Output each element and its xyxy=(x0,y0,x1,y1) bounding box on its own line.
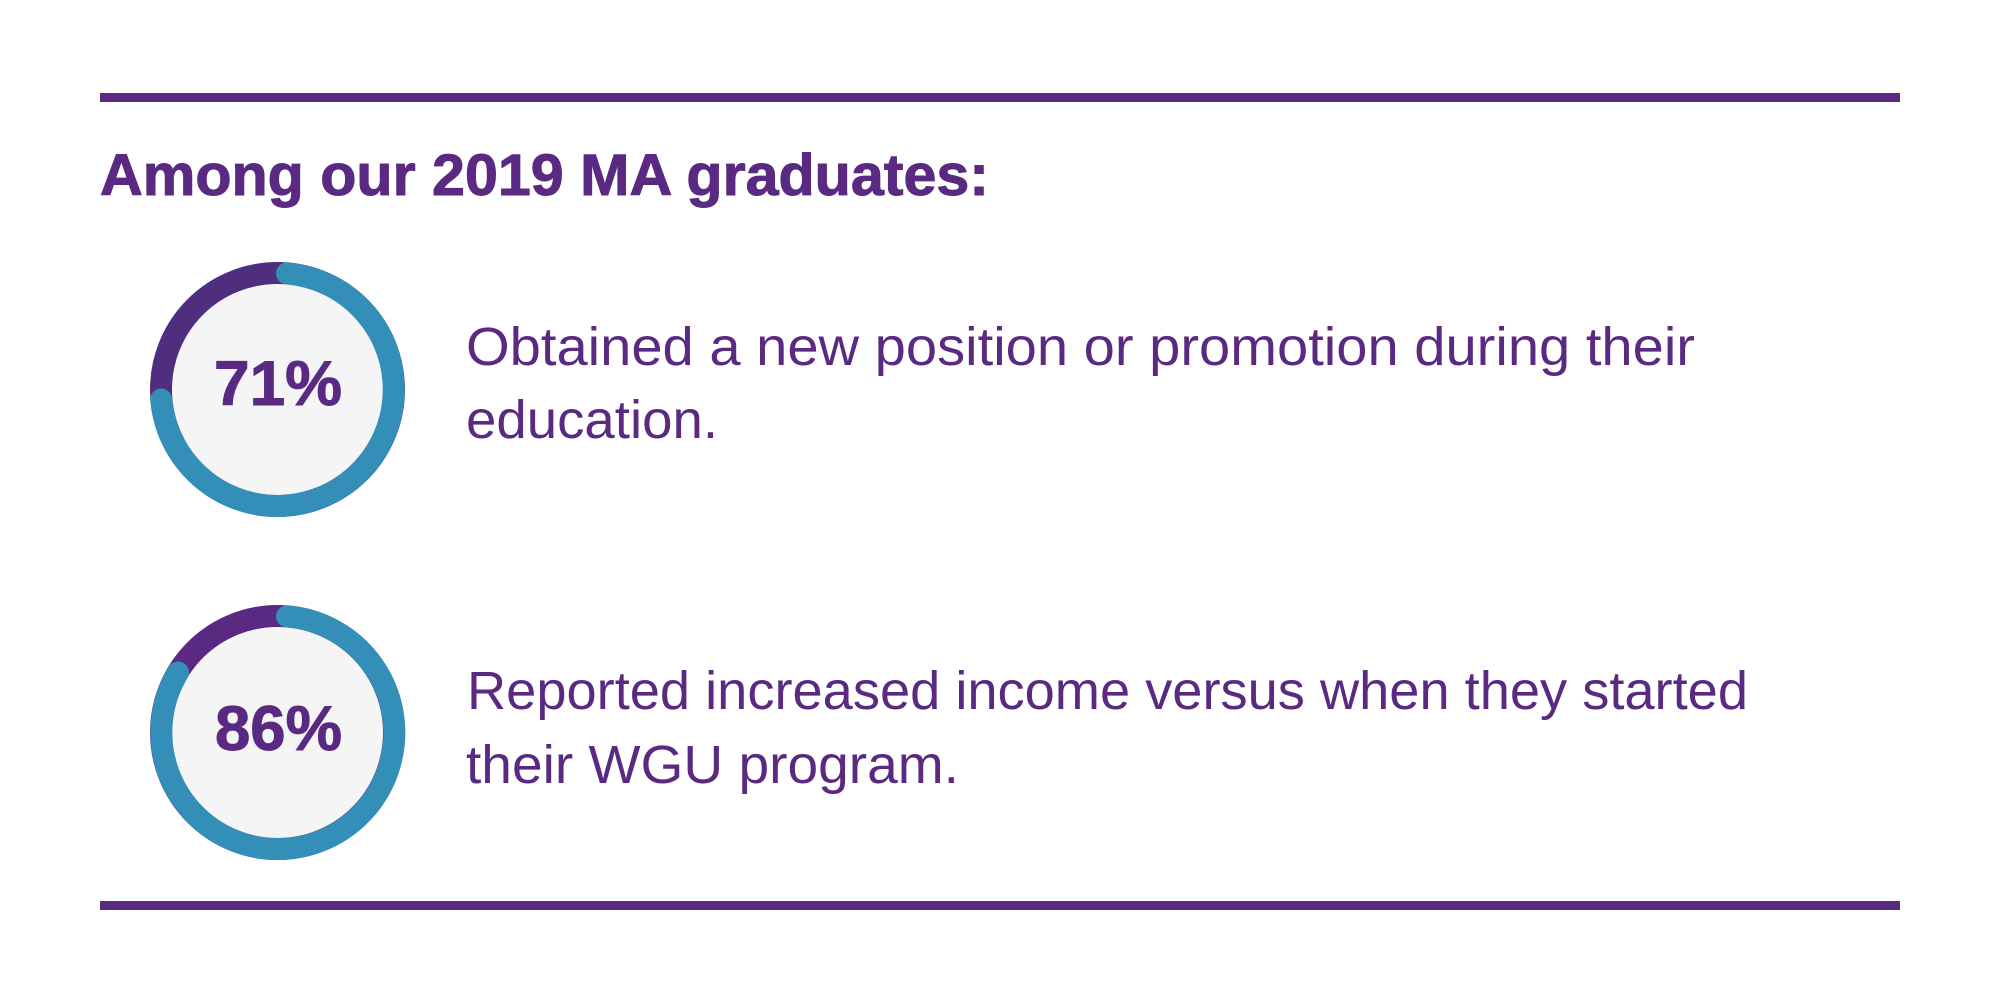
stat row: 71% new position or promotion xyxy=(161,273,1710,506)
donut chart: 71% xyxy=(161,273,394,506)
description: 71%: Obtained a new position or promotion during their xyxy=(466,317,1695,377)
bottom rule xyxy=(100,901,1900,910)
description: 86%: Reported increased income versus when they started xyxy=(467,661,1748,721)
description: 86%: their WGU program. xyxy=(466,735,959,795)
donut chart: 86% xyxy=(161,616,394,849)
top rule xyxy=(100,93,1900,102)
donut chart: 86%: 86% xyxy=(215,694,342,764)
donut chart: 71%: 71% xyxy=(214,349,342,419)
title: Among our 2019 MA graduates: xyxy=(100,143,989,208)
stat row: 86% increased income xyxy=(161,616,1763,849)
description: 71%: education. xyxy=(466,390,718,450)
